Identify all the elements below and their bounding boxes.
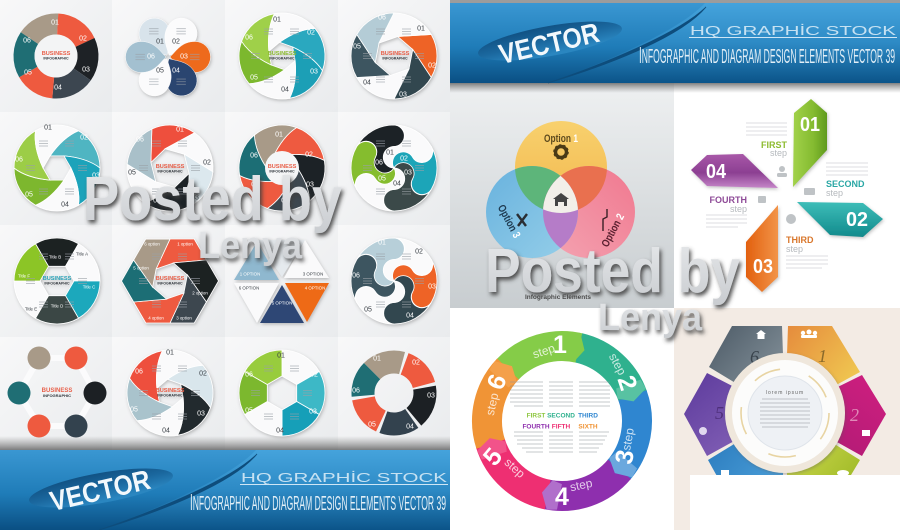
text: first step: step <box>770 148 787 158</box>
panel: grid of sixteen diagrams background <box>0 0 450 450</box>
caption: Infographic Elements <box>525 294 591 301</box>
diagram: aperture with red and black blades: 06 <box>136 136 144 144</box>
centre headings: FIRST <box>527 412 545 420</box>
blade: 04 purple: 04 <box>706 161 727 183</box>
lower banner swoosh <box>0 450 256 530</box>
centre dial <box>725 353 845 473</box>
step labels: 3 <box>610 448 640 466</box>
lower banner heading: HQ GRAPHİC STOCK <box>241 470 447 485</box>
dial heading: lorem ipsum <box>766 390 804 396</box>
shadow strip above upper banner <box>450 0 900 3</box>
blade: 01 green: 01 <box>800 114 820 136</box>
banner rule <box>689 36 897 38</box>
step labels: 2 <box>612 372 642 394</box>
venn diagram <box>486 121 635 301</box>
diagram: large green and teal swirl: 04 <box>61 202 69 208</box>
overlap: green <box>515 166 560 210</box>
watermark: left: Posted by <box>83 165 342 234</box>
watermark: left: Lenya <box>198 225 303 267</box>
diagram: green and cyan sector ring: 03 <box>309 408 317 416</box>
segment 3 <box>785 413 860 505</box>
diagram: six colour swirl hexagon: 05 <box>251 182 259 188</box>
banner: bottom left <box>0 450 450 530</box>
diagram: aperture with red and black blades: 05 <box>128 170 136 176</box>
diagram: yin-yang swirl with orange and slate: 02 <box>415 248 423 256</box>
option 1 circle <box>515 121 607 213</box>
diagram: hexagon of six triangles <box>234 240 329 323</box>
diagram: hexagon of six triangles: 1 OPTION <box>240 272 260 276</box>
diagram: six yin-yang petals: 06 <box>375 160 383 166</box>
watermark: right: Lenya <box>598 297 703 339</box>
overlap: orange <box>543 166 607 210</box>
diagram: green and cyan sector ring: 05 <box>245 408 253 414</box>
icons: small grey symbols <box>758 166 815 224</box>
diagram: aperture with orange and slate blades: 02 <box>428 62 436 70</box>
diagram: six colour swirl hexagon: 02 <box>305 152 313 158</box>
diagram: six circles on hexagon ring: BUSINESS <box>42 388 72 394</box>
diagram: six petal flower: 03 <box>180 54 188 60</box>
diagram: large green and teal swirl <box>3 112 111 224</box>
icon: people <box>801 330 817 338</box>
segment 5: 5 <box>715 403 724 423</box>
banner wordmark: VECTOR <box>496 17 602 70</box>
lower banner rule <box>240 484 448 486</box>
ring arrowheads <box>475 331 649 512</box>
step star diagram <box>691 99 883 292</box>
diagram: green and cyan swirl: BUSINESS <box>268 51 297 57</box>
diagram: aperture with orange and slate blades: 04 <box>363 80 371 86</box>
diagram: thick six blob ring: 01 <box>373 356 381 362</box>
diagram: yin-yang swirl with orange and slate: 03 <box>428 284 436 290</box>
text: second step: step <box>826 188 843 198</box>
panel: cream hexagon background <box>674 308 900 530</box>
diagram: large green and teal swirl: 06 <box>15 156 23 164</box>
diagram: titled sector wheel: Title E <box>25 306 37 312</box>
text: second step <box>826 163 868 198</box>
diagram: titled sector wheel: INFOGRAPHIC <box>44 282 70 286</box>
diagram: six segment arrow ring: BUSINESS <box>42 51 71 57</box>
lower banner oval <box>27 461 175 515</box>
overlap: centre with house icon <box>543 176 578 213</box>
icon: arrow down <box>603 209 607 231</box>
watermark: right <box>485 237 740 339</box>
banner: top right <box>450 3 900 83</box>
diagram: large green and teal swirl: 05 <box>25 192 33 198</box>
step labels: 6 <box>481 370 513 394</box>
diagram: aperture with red and black blades: 04 <box>153 198 161 204</box>
diagram: six petal flower: 02 <box>172 38 180 46</box>
label: option 1: Option 1 <box>544 133 578 145</box>
shadow above lower banner <box>0 436 450 450</box>
diagram: six petal flower: 01 <box>156 38 164 46</box>
blade: 03 orange <box>746 205 778 292</box>
diagram: curved aperture with red and black <box>113 343 227 443</box>
diagram: thick six blob ring: 05 <box>368 422 376 428</box>
diagram: six petal flower: 04 <box>172 68 180 74</box>
diagram: rounded hexagon option swirl: 3 option <box>176 316 192 320</box>
diagram: aperture with orange and slate blades <box>338 2 450 110</box>
diagram: hexagon of six triangles: 3 OPTION <box>303 272 323 276</box>
text: first step: FIRST <box>761 140 788 150</box>
option 2 circle <box>543 166 635 258</box>
diagram: aperture with red and black blades <box>115 113 225 223</box>
diagram: curved aperture with red and black: 02 <box>199 370 207 378</box>
blade: 04 purple <box>691 154 778 188</box>
diagram: six colour swirl hexagon <box>232 111 332 225</box>
white cover block <box>690 475 900 530</box>
diagram: green and cyan swirl: 03 <box>310 68 318 76</box>
text: INFOGRAPHIC AND DIAGRAM DESIGN ELEMENTS VECTOR 39 <box>190 489 446 515</box>
step labels: step <box>619 427 637 452</box>
diagram: yin-yang swirl with orange and slate: 06 <box>352 272 360 280</box>
segment 4 <box>708 413 785 505</box>
diagram: green and cyan sector ring: 01 <box>277 352 285 360</box>
diagram: titled sector wheel: Title C <box>83 284 95 290</box>
diagram: green and cyan sector ring: 04 <box>276 428 284 434</box>
diagram: six segment arrow ring: 02 <box>79 36 87 42</box>
diagram: six colour swirl hexagon: 04 <box>281 198 289 204</box>
text: third step: step <box>786 244 803 254</box>
diagram: curved aperture with red and black: INFOGRAPHIC <box>157 394 183 398</box>
text: fourth step: step <box>730 204 747 214</box>
diagram: six circles on hexagon ring <box>8 346 106 438</box>
label: option 3: Option 3 <box>495 203 522 240</box>
dial body lines <box>760 399 810 427</box>
centre body text lines <box>510 382 610 452</box>
watermark: left <box>83 165 342 267</box>
banner swoosh edge <box>548 7 706 83</box>
diagram: titled sector wheel: Title F <box>18 274 30 278</box>
ring segments <box>456 315 668 527</box>
overlap: purple <box>543 176 578 248</box>
diagram: green and cyan swirl: 02 <box>307 30 315 36</box>
diagram: rounded hexagon option swirl: 6 option <box>144 242 160 246</box>
segment 6 <box>709 326 785 413</box>
diagram: six yin-yang petals: 04 <box>393 180 401 188</box>
text: first step <box>746 123 788 158</box>
step labels <box>478 331 642 511</box>
diagram: large green and teal swirl: 02 <box>80 134 88 142</box>
step labels: step <box>502 455 528 481</box>
centre headings: SECOND <box>547 412 575 420</box>
centre headings: THIRD <box>578 412 598 420</box>
watermark: right: Posted by <box>485 237 740 306</box>
text: third step <box>786 235 828 268</box>
diagram: titled sector wheel <box>3 225 111 337</box>
diagram: green and cyan swirl <box>225 6 339 106</box>
diagram: large green and teal swirl: 03 <box>92 172 100 180</box>
diagram: six segment arrow ring: 01 <box>51 20 59 26</box>
diagram: six segment arrow ring <box>11 11 101 101</box>
diagram: curved aperture with red and black: 04 <box>162 428 170 434</box>
diagram: aperture with orange and slate blades: 05 <box>353 44 361 50</box>
diagram: aperture with orange and slate blades: 01 <box>417 26 425 32</box>
diagram: six petal flower: 06 <box>147 54 155 60</box>
diagram: aperture with orange and slate blades: 06 <box>378 14 386 22</box>
icon: crossing arrows <box>517 214 527 226</box>
diagram: six petal flower <box>126 12 210 102</box>
diagram: aperture with orange and slate blades: BUSINESS <box>381 51 410 57</box>
lower banner swoosh edge <box>99 454 257 530</box>
diagram: titled sector wheel: Title D <box>51 304 63 308</box>
diagram: aperture with orange and slate blades: 03 <box>399 92 407 98</box>
diagram: six circles on hexagon ring: INFOGRAPHIC <box>43 393 71 398</box>
banner heading: HQ GRAPHİC STOCK <box>690 23 896 38</box>
step labels: step <box>569 476 594 494</box>
centre headings <box>522 412 598 430</box>
lower banner wordmark: VECTOR <box>47 464 153 517</box>
label: option 2: Option 2 <box>600 212 627 249</box>
diagram: green and cyan swirl: 01 <box>273 16 281 24</box>
step labels: step <box>531 341 557 361</box>
banner swoosh <box>450 3 705 83</box>
segment 1 <box>785 326 860 413</box>
diagram: aperture with red and black blades: 03 <box>191 194 199 202</box>
diagram: thick six blob ring <box>350 349 438 437</box>
diagram: six petal flower: 05 <box>156 68 164 74</box>
blade: 02 teal <box>797 202 883 237</box>
option 3 circle <box>486 166 578 258</box>
shadow below upper banner <box>450 83 900 93</box>
diagram: rounded hexagon option swirl: 5 option <box>133 266 149 270</box>
centre headings: SIXTH <box>578 424 598 430</box>
diagram: hexagon of six triangles: 4 OPTION <box>305 286 325 290</box>
diagram: yin-yang swirl with orange and slate: 04 <box>406 312 414 320</box>
diagram: green and cyan swirl: 04 <box>281 86 289 94</box>
diagram: curved aperture with red and black: 01 <box>166 350 174 356</box>
diagram: six yin-yang petals: 03 <box>404 170 412 176</box>
diagram: rounded hexagon option swirl: 4 option <box>148 316 164 320</box>
step labels: step <box>606 351 629 378</box>
diagram: thick six blob ring: 04 <box>406 424 414 430</box>
diagram: green and cyan sector ring: 02 <box>310 372 318 378</box>
diagram: aperture with red and black blades: 01 <box>176 126 184 134</box>
diagram: six colour swirl hexagon: INFOGRAPHIC <box>269 170 295 174</box>
diagram: six yin-yang petals: 05 <box>378 176 386 182</box>
segment 2 <box>785 375 886 456</box>
diagram: rounded hexagon option swirl: BUSINESS <box>156 276 185 282</box>
hexagon segment diagram <box>684 326 900 530</box>
diagram: yin-yang swirl with orange and slate: 01 <box>378 240 386 246</box>
diagram: large green and teal swirl: 01 <box>44 124 52 132</box>
diagram: six yin-yang petals <box>338 113 450 223</box>
diagram: green and cyan swirl: 06 <box>245 34 253 42</box>
diagram: six segment arrow ring: 03 <box>82 66 90 74</box>
diagram: six segment arrow ring: 05 <box>24 70 32 76</box>
dial rim captions <box>741 369 829 457</box>
diagram: six segment arrow ring: 06 <box>23 38 31 44</box>
blade: 03 orange: 03 <box>753 256 773 278</box>
segment 2: 2 <box>850 405 859 425</box>
diagram: rounded hexagon option swirl: 1 option <box>177 242 193 246</box>
segment 6: 6 <box>750 347 759 367</box>
centre headings: FIFTH <box>552 424 571 430</box>
diagram: thick six blob ring: 06 <box>352 388 360 394</box>
step labels: 5 <box>478 443 508 471</box>
diagram: curved aperture with red and black: 06 <box>135 368 143 376</box>
diagram: hexagon of six triangles: 6 OPTION <box>239 286 259 290</box>
diagram: green and cyan swirl: 05 <box>250 74 258 82</box>
text: fourth step: FOURTH <box>710 195 747 205</box>
diagram: titled sector wheel: Title B <box>49 254 61 260</box>
six step ring diagram <box>456 315 668 527</box>
panel: venn background <box>450 83 674 308</box>
diagram: curved aperture with red and black: 05 <box>130 406 138 414</box>
diagram: aperture with red and black blades: BUSINESS <box>156 164 185 170</box>
diagram: aperture with red and black blades: INFOGRAPHIC <box>157 170 183 174</box>
diagram: six colour swirl hexagon: 03 <box>306 182 314 188</box>
text: third step: THIRD <box>786 235 814 245</box>
diagram: titled sector wheel: BUSINESS <box>43 276 72 282</box>
segment 1: 1 <box>818 346 827 366</box>
diagram: six segment arrow ring: 04 <box>54 84 62 92</box>
step labels: step <box>483 391 501 417</box>
text: second step: SECOND <box>826 179 865 189</box>
blade: 01 green <box>793 99 827 187</box>
step labels: 1 <box>553 331 567 359</box>
diagram: yin-yang swirl with orange and slate <box>338 226 450 336</box>
diagram: curved aperture with red and black: 03 <box>197 410 205 418</box>
diagram: rounded hexagon option swirl <box>115 228 225 334</box>
text: fourth step <box>706 195 747 227</box>
diagram: titled sector wheel: Title A <box>76 252 88 256</box>
panel: white ring background <box>450 308 674 530</box>
diagram: curved aperture with red and black: BUSINESS <box>156 388 185 394</box>
centre headings: FOURTH <box>522 424 550 430</box>
banner oval <box>476 14 624 68</box>
diagram: six yin-yang petals: 02 <box>400 156 408 162</box>
diagram: green and cyan sector ring <box>226 339 338 447</box>
diagram: thick six blob ring: 03 <box>427 392 435 400</box>
diagram: six yin-yang petals: 01 <box>386 150 394 156</box>
blade: 02 teal: 02 <box>846 209 868 231</box>
diagram: aperture with orange and slate blades: INFOGRAPHIC <box>382 56 408 60</box>
diagram: hexagon of six triangles: 5 OPTION <box>272 300 292 306</box>
icon: gear <box>554 145 568 159</box>
diagram: green and cyan sector ring: 06 <box>245 372 253 378</box>
segment 5 <box>684 373 785 456</box>
diagram: six segment arrow ring: INFOGRAPHIC <box>43 56 69 60</box>
diagram: six colour swirl hexagon: 06 <box>250 152 258 160</box>
diagram: aperture with red and black blades: 02 <box>203 160 211 166</box>
panel: white step star background <box>674 83 900 308</box>
diagram: yin-yang swirl with orange and slate: 05 <box>364 306 372 314</box>
diagram: rounded hexagon option swirl: INFOGRAPHIC <box>157 282 183 286</box>
diagram: six colour swirl hexagon: BUSINESS <box>268 164 297 170</box>
step labels: 4 <box>555 483 569 511</box>
diagram: thick six blob ring: 02 <box>412 360 420 366</box>
diagram: rounded hexagon option swirl: 2 option <box>192 290 208 296</box>
diagram: green and cyan swirl: INFOGRAPHIC <box>269 56 295 60</box>
diagram: six colour swirl hexagon: 01 <box>275 132 283 138</box>
